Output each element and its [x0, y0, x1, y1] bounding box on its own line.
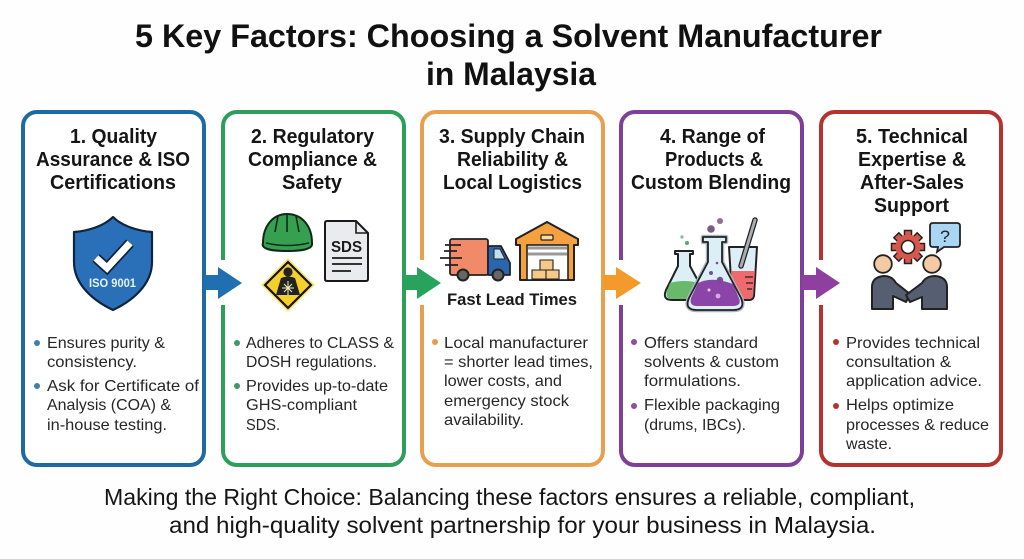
icon: warehouse [516, 222, 578, 280]
text: range of products bullets: Offers standard [644, 335, 758, 352]
icon: gear [892, 230, 924, 264]
heading: range of products: Products & [665, 148, 763, 171]
text: technical bullets: Helps optimize [846, 397, 954, 414]
text: range of products bullets: formulations. [644, 373, 741, 390]
panel: supply chain [418, 112, 603, 465]
arrow: green [404, 267, 441, 299]
text: supply chain bullets: emergency stock [444, 393, 570, 410]
text: regulatory bullets: Adheres to CLASS & [246, 335, 394, 352]
text: technical bullets: Provides technical [846, 335, 980, 352]
heading: regulatory compliance: 2. Regulatory [251, 125, 375, 148]
heading: technical expertise: After-Sales [860, 171, 964, 194]
text: regulatory bullets: GHS-compliant [246, 397, 358, 414]
heading: supply chain [439, 125, 585, 194]
text: supply chain bullets: lower costs, and [444, 373, 562, 390]
text: quality assurance bullets: Analysis (COA) & [47, 397, 171, 414]
icon: question speech bubble: ? [940, 227, 950, 246]
text: regulatory bullets: DOSH regulations. [246, 354, 377, 371]
heading: range of products: Custom Blending [631, 171, 791, 194]
icon: delivery truck [440, 239, 510, 280]
icon: question speech bubble [930, 223, 960, 252]
arrow: blue [204, 267, 242, 299]
text: technical bullets: consultation & [846, 354, 951, 371]
text: regulatory bullets: Provides up-to-date [246, 378, 388, 395]
icon: green hard hat [263, 214, 312, 251]
icon: SDS document: SDS [331, 239, 362, 256]
icon: ISO 9001 shield: ISO 9001 [89, 276, 136, 290]
heading: quality assurance: Certifications [50, 171, 176, 194]
panel: technical expertise [817, 112, 1001, 465]
heading: supply chain: Reliability & [457, 148, 568, 171]
heading: quality assurance [36, 125, 190, 194]
title: 5 Key Factors: Choosing a Solvent Manufacturer [135, 18, 882, 54]
heading: supply chain: Local Logistics [443, 171, 582, 194]
text: range of products bullets: solvents & custom [644, 354, 779, 371]
icon: SDS document [325, 221, 368, 281]
title [135, 18, 882, 92]
icon: ISO 9001 shield [74, 217, 152, 310]
footer summary: and high-quality solvent partnership for your business in Malaysia. [169, 512, 876, 538]
heading: supply chain: 3. Supply Chain [439, 125, 585, 148]
heading: quality assurance: 1. Quality [70, 125, 158, 148]
panel: range of products [617, 112, 802, 465]
text: technical bullets: processes & reduce [846, 417, 989, 434]
text: range of products bullets: (drums, IBCs). [644, 417, 746, 434]
title: in Malaysia [426, 56, 596, 92]
arrow: purple [802, 267, 840, 299]
icon: laboratory flasks [665, 218, 757, 310]
text: technical bullets [833, 335, 989, 453]
text: fast lead times: Fast Lead Times [447, 290, 577, 309]
heading: regulatory compliance [248, 125, 377, 194]
text: technical bullets: application advice. [846, 373, 982, 390]
text: technical bullets: waste. [845, 436, 892, 453]
heading: regulatory compliance: Safety [282, 171, 343, 194]
text: supply chain bullets: Local manufacturer [444, 335, 589, 352]
text: quality assurance bullets: Ask for Certificate of [47, 378, 200, 395]
text: supply chain bullets: availability. [444, 412, 524, 429]
icon: health hazard diamond [261, 258, 315, 312]
panel: regulatory compliance [219, 112, 404, 465]
heading: technical expertise: 5. Technical [856, 125, 968, 148]
heading: range of products [631, 125, 791, 194]
text: quality assurance bullets [34, 335, 200, 434]
text: range of products bullets [631, 335, 780, 434]
text: quality assurance bullets: Ensures purity & [47, 335, 165, 352]
text: regulatory bullets [234, 335, 394, 434]
text: regulatory bullets: SDS. [246, 417, 280, 434]
footer summary: Making the Right Choice: Balancing these factors ensures a reliable, compliant, [104, 484, 915, 510]
text: supply chain bullets [432, 335, 593, 429]
heading: regulatory compliance: Compliance & [248, 148, 377, 171]
heading: technical expertise [856, 125, 968, 217]
heading: technical expertise: Expertise & [858, 148, 966, 171]
arrow: orange [603, 267, 641, 299]
heading: technical expertise: Support [874, 194, 949, 217]
text: quality assurance bullets: in-house testing. [47, 417, 167, 434]
text: supply chain bullets: = shorter lead times, [444, 354, 593, 371]
footer summary [104, 484, 915, 538]
text: quality assurance bullets: consistency. [47, 354, 137, 371]
heading: quality assurance: Assurance & ISO [36, 148, 190, 171]
text: range of products bullets: Flexible packaging [644, 397, 780, 414]
panel: quality assurance [23, 112, 204, 465]
icon: handshake [872, 255, 947, 309]
heading: range of products: 4. Range of [660, 125, 765, 148]
